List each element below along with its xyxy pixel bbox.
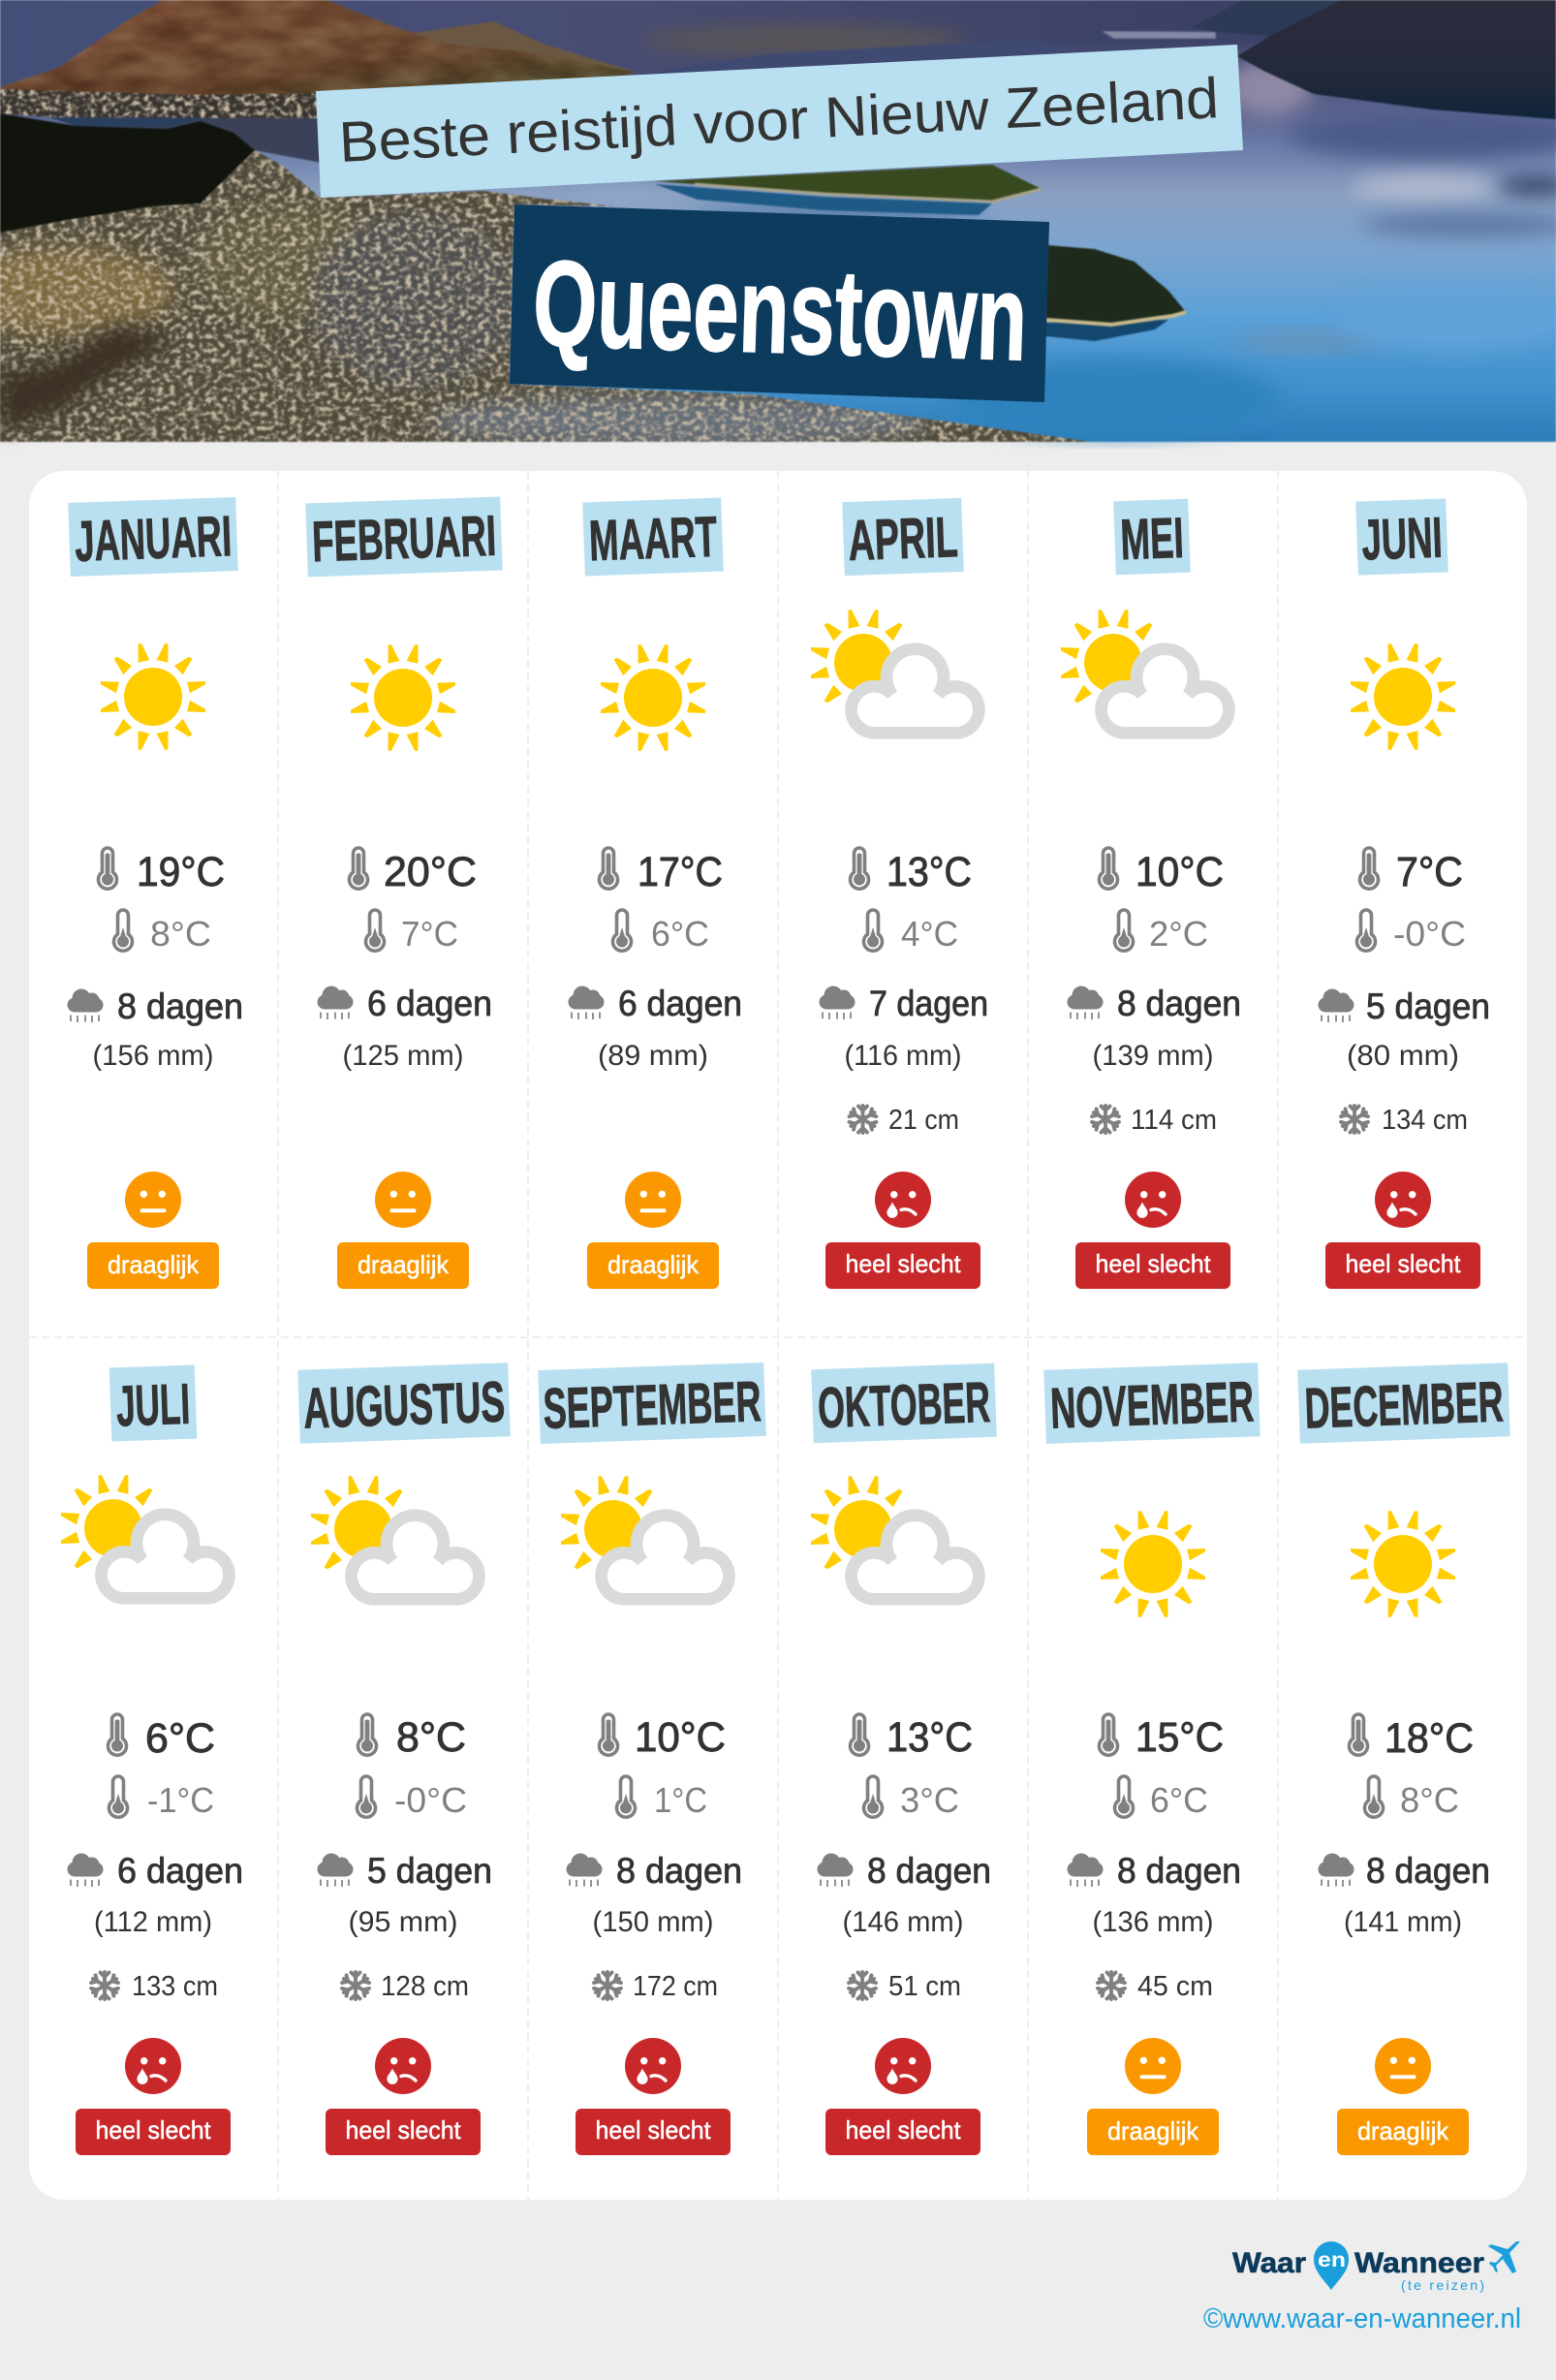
snowfall: 21 cm: [888, 1105, 959, 1136]
rain days: [1318, 1851, 1490, 1891]
rating badge: [1337, 2109, 1469, 2155]
low temperature: [1114, 1776, 1208, 1820]
rain days: [568, 984, 742, 1023]
high temperature: [109, 1714, 215, 1762]
heading: juni: [1355, 498, 1448, 576]
rating badge: draaglijk: [607, 1250, 700, 1279]
icon: sun: [1101, 1511, 1205, 1617]
rating face: [875, 2038, 931, 2094]
rating face: [375, 1172, 431, 1228]
heading: mei: MEI: [1119, 506, 1185, 572]
rating badge: [1087, 2109, 1219, 2155]
heading: november: NOVEMBER: [1049, 1369, 1255, 1441]
title banner: Queenstown: Queenstown: [531, 235, 1029, 387]
icon: sun: [1351, 643, 1455, 750]
high temperature: 17°C: [638, 849, 723, 895]
heading: april: [842, 498, 964, 576]
rating badge: [326, 2109, 481, 2155]
snowfall: 51 cm: [888, 1971, 961, 2002]
snowfall: 134 cm: [1382, 1105, 1468, 1136]
rain days: [820, 984, 988, 1023]
heading: maart: MAART: [588, 505, 718, 573]
heading: maart: [582, 498, 724, 576]
rating badge: [1325, 1242, 1480, 1289]
heading: juli: [109, 1364, 197, 1442]
rating badge: heel slecht: [845, 1249, 961, 1278]
heading: september: SEPTEMBER: [542, 1369, 762, 1441]
high temperature: 6°C: [145, 1715, 215, 1762]
rating face: [1125, 1172, 1181, 1228]
icon: sun: [601, 644, 705, 751]
month: april: [811, 498, 988, 1289]
rain days: [818, 1851, 991, 1891]
rating badge: [825, 1242, 980, 1289]
low temperature: [109, 1776, 214, 1820]
icon: sun: [1351, 1511, 1455, 1617]
low temperature: [616, 1776, 707, 1820]
heading: februari: [305, 497, 503, 577]
rating badge: draaglijk: [1357, 2116, 1449, 2145]
low temperature: 8°C: [1400, 1780, 1459, 1820]
heading: januari: [68, 497, 238, 577]
icon: airplane: [1488, 2241, 1520, 2273]
rainfall: (141 mm): [1344, 1906, 1462, 1938]
rain days: [1318, 986, 1490, 1026]
low temperature: 7°C: [401, 914, 458, 954]
heading: november: [1043, 1362, 1260, 1444]
icon: map pin: [1314, 2241, 1349, 2290]
month: december: [1297, 1362, 1510, 2155]
rain days: 8 dagen: [867, 1851, 991, 1891]
month: maart: [568, 498, 742, 1289]
logo: Waar en Wanneer te reizen: Wanneer: [1354, 2247, 1484, 2279]
low temperature: 6°C: [651, 914, 709, 954]
rating badge: heel slecht: [595, 2115, 711, 2145]
high temperature: [1099, 848, 1224, 895]
rain days: 6 dagen: [117, 1851, 243, 1891]
low temperature: [366, 910, 458, 954]
low temperature: 4°C: [901, 914, 958, 954]
heading: oktober: [811, 1363, 997, 1443]
rain days: [1068, 1851, 1241, 1891]
low temperature: [864, 910, 958, 954]
high temperature: 10°C: [635, 1714, 726, 1761]
high temperature: [358, 1714, 466, 1761]
low temperature: [1114, 910, 1208, 954]
month: september: [538, 1362, 766, 2155]
rating badge: draaglijk: [1107, 2116, 1199, 2145]
high temperature: 18°C: [1385, 1715, 1474, 1762]
title banner: Beste reistijd voor Nieuw Zeeland: [316, 45, 1243, 198]
high temperature: [99, 848, 225, 895]
rating badge: [576, 2109, 731, 2155]
rain days: 8 dagen: [1366, 1851, 1490, 1891]
snowfall: [1098, 1971, 1213, 2002]
low temperature: -0°C: [394, 1780, 467, 1820]
rain days: 6 dagen: [618, 984, 742, 1023]
snowfall: 133 cm: [132, 1971, 218, 2002]
heading: september: [538, 1362, 766, 1444]
logo: Waar en Wanneer te reizen: [1232, 2241, 1520, 2293]
rain days: 7 dagen: [869, 984, 988, 1023]
rainfall: (116 mm): [845, 1040, 961, 1072]
heading: januari: JANUARI: [74, 504, 233, 574]
heading: juli: JULI: [115, 1372, 191, 1438]
rating badge: heel slecht: [95, 2115, 211, 2145]
low temperature: 3°C: [900, 1780, 959, 1820]
rainfall: (139 mm): [1093, 1040, 1213, 1072]
rain days: 8 dagen: [616, 1851, 742, 1891]
header photo: Queenstown aerial view: [0, 0, 1556, 449]
icon: sun behind cloud: [811, 1476, 979, 1599]
rating face: [125, 2038, 181, 2094]
month: november: [1043, 1362, 1260, 2155]
panel: monthly weather grid: [29, 471, 1527, 2200]
rain days: 8 dagen: [117, 986, 243, 1026]
rain days: 5 dagen: [1366, 986, 1490, 1026]
icon: sun: [101, 643, 205, 750]
rain days: 8 dagen: [1117, 984, 1241, 1023]
high temperature: 10°C: [1136, 849, 1224, 895]
low temperature: 6°C: [1150, 1780, 1208, 1820]
high temperature: [851, 848, 972, 895]
low temperature: -0°C: [1393, 914, 1466, 954]
low temperature: [357, 1776, 467, 1820]
low temperature: [1356, 910, 1466, 954]
low temperature: [864, 1776, 959, 1820]
month: oktober: [811, 1363, 997, 2155]
rainfall: (150 mm): [593, 1906, 713, 1938]
snowfall: [342, 1971, 469, 2002]
heading: april: APRIL: [847, 505, 959, 573]
rainfall: (125 mm): [343, 1040, 463, 1072]
rainfall: (112 mm): [94, 1906, 212, 1938]
rating badge: [825, 2109, 980, 2155]
month: augustus: [297, 1362, 511, 2155]
month: februari: [305, 497, 503, 1289]
month: mei: [1061, 499, 1241, 1289]
rating badge: heel slecht: [845, 2115, 961, 2145]
rain days: [318, 1851, 492, 1891]
rainfall: (156 mm): [93, 1040, 213, 1072]
high temperature: [599, 848, 723, 895]
rating badge: [337, 1242, 469, 1289]
heading: augustus: AUGUSTUS: [302, 1369, 506, 1441]
high temperature: 7°C: [1396, 849, 1463, 895]
rain days: [318, 984, 492, 1023]
heading: juni: JUNI: [1360, 506, 1444, 572]
snowfall: 128 cm: [381, 1971, 469, 2002]
icon: sun behind cloud: [1061, 610, 1229, 733]
rating face: [375, 2038, 431, 2094]
low temperature: [612, 910, 709, 954]
snowfall: [1341, 1105, 1468, 1136]
title banner: Beste reistijd voor Nieuw Zeeland: Beste reistijd voor Nieuw Zeeland: [337, 66, 1220, 174]
rain days: [1068, 984, 1241, 1023]
high temperature: 20°C: [384, 849, 477, 895]
rain days: 5 dagen: [367, 1851, 492, 1891]
rainfall: (95 mm): [349, 1906, 457, 1938]
rating face: [1125, 2038, 1181, 2094]
high temperature: 13°C: [887, 849, 972, 895]
rating badge: heel slecht: [1095, 1249, 1211, 1278]
icon: sun behind cloud: [561, 1476, 729, 1599]
title banner: Queenstown: [510, 204, 1049, 402]
low temperature: [1364, 1776, 1459, 1820]
rating badge: [587, 1242, 719, 1289]
website credit: ©www.waar-en-wanneer.nl: [1203, 2303, 1521, 2334]
high temperature: [1360, 848, 1463, 895]
rating badge: [76, 2109, 231, 2155]
snowfall: 172 cm: [633, 1971, 718, 2002]
low temperature: [114, 910, 211, 954]
month: januari: [68, 497, 243, 1289]
heading: februari: FEBRUARI: [311, 504, 497, 574]
icon: sun behind cloud: [811, 610, 979, 733]
rating badge: draaglijk: [358, 1250, 450, 1279]
high temperature: [851, 1714, 973, 1761]
logo: Waar en Wanneer te reizen: en: [1318, 2249, 1346, 2271]
snowfall: 45 cm: [1137, 1971, 1213, 2002]
icon: sun behind cloud: [61, 1475, 229, 1598]
rating face: [1375, 1172, 1431, 1228]
high temperature: 19°C: [137, 849, 225, 895]
snowfall: [594, 1971, 718, 2002]
rating badge: [87, 1242, 219, 1289]
rainfall: (136 mm): [1093, 1906, 1213, 1938]
month: juni: [1318, 498, 1490, 1289]
rating face: [1375, 2038, 1431, 2094]
low temperature: 2°C: [1149, 914, 1208, 954]
snowfall: 114 cm: [1131, 1105, 1217, 1136]
heading: augustus: [297, 1362, 511, 1444]
snowfall: [849, 1971, 961, 2002]
snowfall: [91, 1971, 218, 2002]
low temperature: -1°C: [147, 1780, 214, 1820]
rating badge: heel slecht: [345, 2115, 461, 2145]
heading: oktober: OKTOBER: [817, 1370, 991, 1440]
rainfall: (80 mm): [1347, 1040, 1459, 1072]
high temperature: 13°C: [887, 1714, 973, 1761]
rainfall: (146 mm): [843, 1906, 963, 1938]
logo: Waar en Wanneer te reizen: Waar: [1232, 2247, 1306, 2279]
rating face: [125, 1172, 181, 1228]
rain days: 6 dagen: [367, 984, 492, 1023]
icon: sun behind cloud: [311, 1476, 479, 1599]
high temperature: [1099, 1714, 1224, 1761]
high temperature: 8°C: [396, 1714, 466, 1761]
high temperature: 15°C: [1136, 1714, 1224, 1761]
low temperature: 1°C: [654, 1780, 707, 1820]
icon: sun: [351, 644, 455, 751]
heading: mei: [1113, 499, 1191, 575]
month: juli: [61, 1364, 243, 2155]
low temperature: 8°C: [150, 914, 211, 954]
rainfall: (89 mm): [598, 1040, 708, 1072]
rating face: [875, 1172, 931, 1228]
rating badge: [1075, 1242, 1230, 1289]
rain days: 8 dagen: [1117, 1851, 1241, 1891]
snowfall: [1092, 1105, 1217, 1136]
logo: Waar en Wanneer te reizen: (te reizen): [1401, 2277, 1484, 2293]
rating badge: draaglijk: [108, 1250, 200, 1279]
rating face: [625, 2038, 681, 2094]
rating badge: heel slecht: [1345, 1249, 1461, 1278]
rating face: [625, 1172, 681, 1228]
snowfall: [849, 1105, 959, 1136]
high temperature: [1349, 1714, 1474, 1762]
